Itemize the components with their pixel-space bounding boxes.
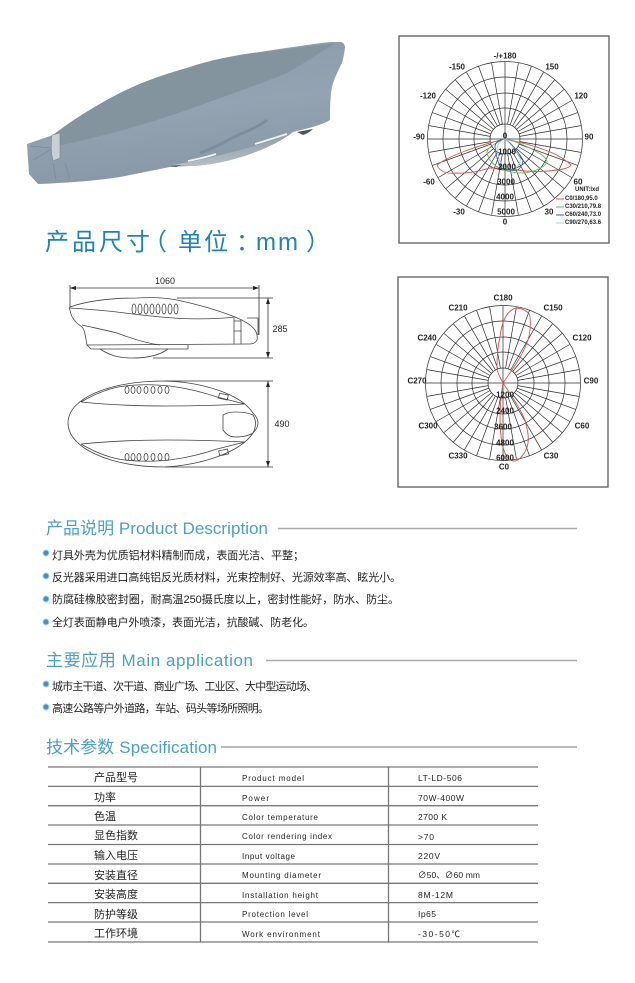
legend 1: C60/240,73.0	[565, 212, 602, 218]
angle labels 1: -60	[423, 178, 435, 186]
heading: product dimensions: mm	[256, 229, 300, 256]
table column: Chinese names: 输入电压	[94, 848, 138, 862]
description list: 全灯表面静电户外喷漆，表面光洁，抗酸碱、防老化。	[52, 615, 314, 629]
legend 1	[556, 187, 602, 226]
table column: Chinese names: 色温	[94, 809, 116, 823]
angle labels 2: C210	[448, 304, 468, 312]
angle labels 1: -90	[413, 132, 425, 142]
table column: English names: Input voltage	[242, 852, 296, 861]
table column: values: 2700 K	[418, 812, 447, 822]
table column: English names: Mounting diameter	[242, 871, 321, 880]
angle labels 1: 2000	[498, 162, 516, 172]
table column: values: >70	[418, 832, 434, 842]
angle labels 2: 3600	[494, 422, 512, 432]
heading: product dimensions: 单位	[178, 229, 228, 256]
table column: values: 8M-12M	[418, 890, 453, 900]
polar chart frame: light distribution 2	[398, 277, 608, 487]
table column: English names	[242, 774, 332, 939]
table column: values: LT-LD-506	[418, 773, 462, 783]
angle labels 2	[407, 294, 599, 472]
angle labels 2: C0	[499, 462, 510, 472]
angle labels 1: 3000	[497, 178, 515, 186]
dimension 285: 285	[272, 324, 288, 334]
description list: 防腐硅橡胶密封圈，耐高温250摄氏度以上，密封性能好，防水、防尘。	[52, 592, 399, 606]
table column: values: 70W-400W	[418, 793, 464, 803]
angle labels 1: 0	[503, 132, 508, 140]
table column: Chinese names: 工作环境	[94, 926, 138, 940]
angle labels 1: -/+180	[494, 52, 517, 60]
table column: English names: Installation height	[242, 891, 319, 900]
table column: Chinese names	[94, 770, 138, 940]
angle labels 1: 30	[545, 208, 554, 216]
section heading: product description: 产品说明 Product Description	[46, 519, 268, 538]
table column: Chinese names: 安装高度	[94, 887, 138, 901]
angle labels 2: 1200	[496, 390, 514, 400]
angle labels 2: 6000	[496, 454, 514, 462]
distribution curves 1	[437, 139, 571, 173]
table column: English names: Power	[242, 794, 269, 803]
table column: Chinese names: 功率	[94, 790, 116, 804]
angle labels 1: 60	[574, 178, 583, 186]
description list: 反光器采用进口高纯铝反光质材料，光束控制好、光源效率高、眩光小。	[52, 570, 401, 584]
application list: 高速公路等户外道路，车站、码头等场所照明。	[52, 701, 269, 715]
side view dimension drawing	[70, 298, 258, 358]
angle labels 2: C240	[417, 334, 437, 342]
table column: values: ∅50、∅60 mm	[418, 870, 480, 880]
table column: Chinese names: 显色指数	[94, 828, 138, 842]
heading: product dimensions: ：	[236, 229, 260, 256]
table column: English names: Color temperature	[242, 813, 319, 822]
dimension 490	[165, 381, 290, 467]
angle labels 1: -150	[449, 62, 466, 72]
angle labels 2: C270	[407, 376, 427, 386]
angle labels 1: 5000	[497, 208, 515, 216]
angle labels 2: C90	[584, 376, 599, 386]
angle labels 2: C300	[418, 422, 438, 430]
dimension 1060: 1060	[155, 276, 175, 286]
legend 1: UNIT:lxd	[575, 187, 599, 193]
angle labels 1: 0	[503, 218, 508, 226]
angle labels 2: C150	[543, 304, 563, 312]
description list	[43, 548, 401, 629]
angle labels 2: C120	[572, 334, 592, 342]
legend 1: C90/270,63.6	[565, 220, 602, 226]
section heading: specification: 技术参数 Specification	[46, 738, 217, 757]
table column: English names: Protection level	[242, 910, 308, 919]
application list: 城市主干道、次干道、商业广场、工业区、大中型运动场、	[52, 679, 317, 693]
distribution curve 2	[497, 308, 530, 461]
legend 1: C0/180,95.0	[565, 196, 598, 202]
table column: Chinese names: 安装直径	[94, 868, 138, 882]
polar grid 2	[426, 306, 580, 460]
dimension 285	[153, 298, 288, 358]
table column: values: 220V	[418, 851, 440, 861]
polar chart frame: luminous intensity 1	[399, 36, 609, 243]
angle labels 1: 4000	[496, 192, 514, 202]
table column: values: Ip65	[418, 909, 436, 919]
dimension 1060	[70, 276, 259, 335]
angle labels 1: -120	[420, 92, 437, 100]
table column: English names: Work environment	[242, 930, 321, 939]
specification table	[48, 767, 538, 942]
angle labels 1: 120	[574, 92, 588, 100]
description list: 灯具外壳为优质铝材料精制而成，表面光洁、平整；	[52, 548, 304, 562]
heading: product dimensions: 产品尺寸	[45, 229, 150, 256]
angle labels 1: 90	[585, 132, 594, 142]
section heading: main application: 主要应用 Main application	[46, 651, 253, 670]
table column: English names: Color rendering index	[242, 832, 332, 841]
angle labels 2: C330	[448, 452, 468, 460]
angle labels 1	[413, 52, 594, 226]
application list	[43, 679, 317, 715]
table column: Chinese names: 产品型号	[94, 770, 138, 784]
angle labels 2: 4800	[496, 438, 514, 448]
angle labels 1: 150	[545, 62, 559, 72]
angle labels 2: 2400	[496, 406, 514, 416]
polar grid 1	[428, 62, 582, 216]
table column: Chinese names: 防护等级	[94, 907, 138, 921]
table column: English names: Product model	[242, 774, 304, 783]
product photo: street lamp	[27, 42, 345, 184]
table column: values: -30-50℃	[418, 929, 460, 939]
top view dimension drawing	[68, 381, 258, 467]
table column: values	[418, 773, 480, 939]
angle labels 2: C60	[575, 422, 590, 430]
dimension 490: 490	[274, 419, 290, 429]
heading: product dimensions: （	[143, 229, 167, 256]
heading: product dimensions: ）	[306, 229, 330, 256]
angle labels 2: C30	[544, 452, 559, 460]
legend 1: C30/210,79.8	[565, 204, 602, 210]
angle labels 1: -30	[453, 208, 465, 216]
angle labels 1: 1000	[498, 148, 516, 156]
angle labels 2: C180	[493, 294, 513, 302]
